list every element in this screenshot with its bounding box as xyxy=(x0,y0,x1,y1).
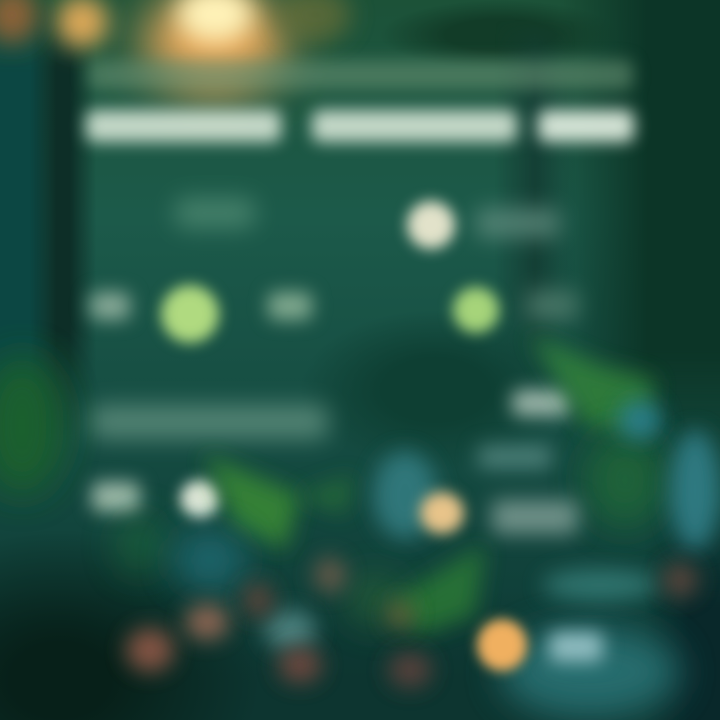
centre label xyxy=(268,292,312,320)
title xyxy=(74,50,646,155)
icon: orange circle xyxy=(477,619,527,671)
icon: white circle xyxy=(407,201,455,249)
middle text block xyxy=(90,405,328,439)
right label xyxy=(526,290,578,320)
bottom right label xyxy=(549,632,603,662)
centre leaves xyxy=(205,455,300,550)
upper left label xyxy=(175,198,255,228)
left leaf xyxy=(0,355,64,495)
icon: pale circle xyxy=(180,480,220,518)
upper right label xyxy=(476,208,560,238)
blue petals xyxy=(373,451,437,539)
berries xyxy=(126,628,174,672)
right text block xyxy=(512,390,570,416)
sunlight glow xyxy=(0,0,360,116)
left label xyxy=(90,292,130,320)
foliage and flowers xyxy=(0,335,720,720)
icon: amber circle xyxy=(420,492,464,534)
icon: green circle xyxy=(453,287,499,333)
lower right text stack xyxy=(470,436,590,546)
right leaves xyxy=(530,335,655,435)
icon: large green circle xyxy=(161,285,219,343)
lower left labels xyxy=(92,482,140,512)
